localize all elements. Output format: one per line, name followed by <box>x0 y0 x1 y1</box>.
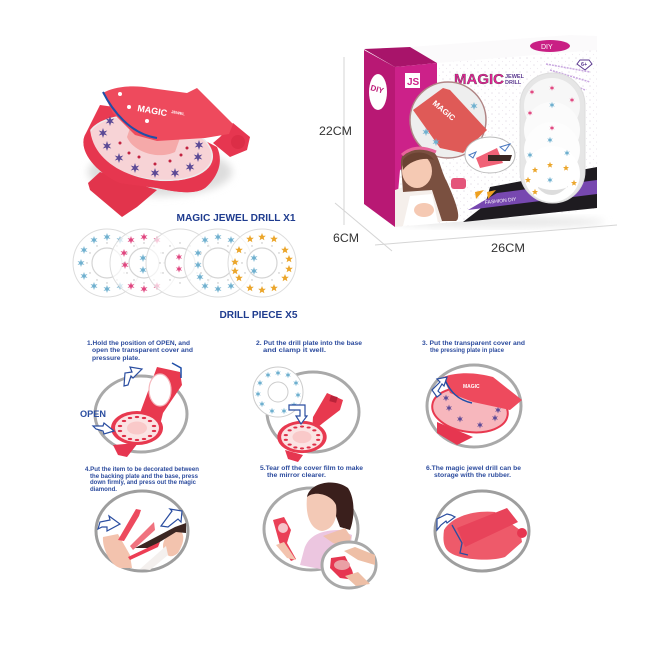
product box: MAGIC <box>431 99 457 123</box>
product box: FASHION DIY <box>485 197 517 206</box>
arrow down <box>289 405 307 424</box>
step 3 illustration <box>427 365 522 447</box>
step 6 text: storage with the rubber. <box>434 472 511 479</box>
box rainbow copy <box>546 64 590 90</box>
arrow left <box>98 516 120 531</box>
step 6 illustration <box>435 491 529 571</box>
step 5 text: the mirror clearer. <box>267 472 326 479</box>
drill pieces x5 <box>73 229 296 297</box>
step 3 illustration: MAGIC <box>463 384 480 390</box>
product box: JS <box>407 77 420 88</box>
dimension: depth: 6CM <box>333 233 359 245</box>
step 4 text: 4.Put the item to be decorated between <box>85 466 199 473</box>
open label: OPEN <box>80 409 106 419</box>
box window drill pieces <box>520 73 585 203</box>
girl <box>307 482 354 530</box>
step 3 text: the pressing plate in place <box>430 347 504 354</box>
dimension: height: 22CM <box>319 126 352 138</box>
dimension: width: 26CM <box>491 243 525 255</box>
label: magic jewel drill: MAGIC JEWEL DRILL X1 <box>176 213 296 224</box>
box girl <box>395 183 458 227</box>
step 1 text: 1.Hold the position of OPEN, and <box>87 340 190 347</box>
product box: DIY <box>369 83 385 96</box>
step 4 text: diamond. <box>90 486 117 493</box>
step 5 text <box>260 465 364 479</box>
step 2 text: and clamp it well. <box>263 347 326 354</box>
box logo: MAGIC <box>454 71 504 88</box>
product photo: magic jewel drill: MAGIC <box>137 103 168 118</box>
arrow <box>437 514 455 530</box>
inset circle <box>322 542 376 588</box>
step 2 text: 2. Put the drill plate into the base <box>256 340 363 347</box>
step 4 text: down firmly, and press out the magic <box>90 479 196 486</box>
product box: DIY <box>541 44 553 51</box>
step 6 text: 6.The magic jewel drill can be <box>426 465 522 472</box>
step 3 text: 3. Put the transparent cover and <box>422 340 525 347</box>
step 3 text <box>422 340 525 354</box>
step 4 text: the backing plate and the base, press <box>90 473 198 480</box>
arrow right <box>161 509 182 527</box>
dimension lines <box>335 57 617 251</box>
arrow up <box>124 367 142 386</box>
arrow <box>432 377 447 397</box>
step 1 text <box>87 340 193 362</box>
box hand inset <box>465 137 515 173</box>
product box: 6+ <box>581 62 587 68</box>
step 4 text <box>85 466 199 493</box>
product box: JEWEL <box>505 74 525 80</box>
step 2 illustration <box>253 367 359 462</box>
box bottom stripes <box>463 167 597 222</box>
box side panel <box>364 50 395 227</box>
step 1 text: pressure plate. <box>92 355 140 362</box>
product photo: magic jewel drill: JEWEL <box>171 109 186 116</box>
product box <box>364 35 605 227</box>
label: drill piece: DRILL PIECE X5 <box>220 310 298 321</box>
step 1 illustration <box>93 363 187 457</box>
step 1 text: open the transparent cover and <box>92 347 193 354</box>
step 4 illustration <box>96 491 188 571</box>
box window disc and lid <box>410 82 486 158</box>
product photo: magic jewel drill <box>83 86 250 217</box>
step 2 text <box>256 340 363 354</box>
arrow open <box>93 423 114 434</box>
step 5 text: 5.Tear off the cover film to make <box>260 465 364 472</box>
step 6 text <box>426 465 522 479</box>
product box: DRILL <box>505 80 522 86</box>
step 5 illustration <box>264 482 376 588</box>
